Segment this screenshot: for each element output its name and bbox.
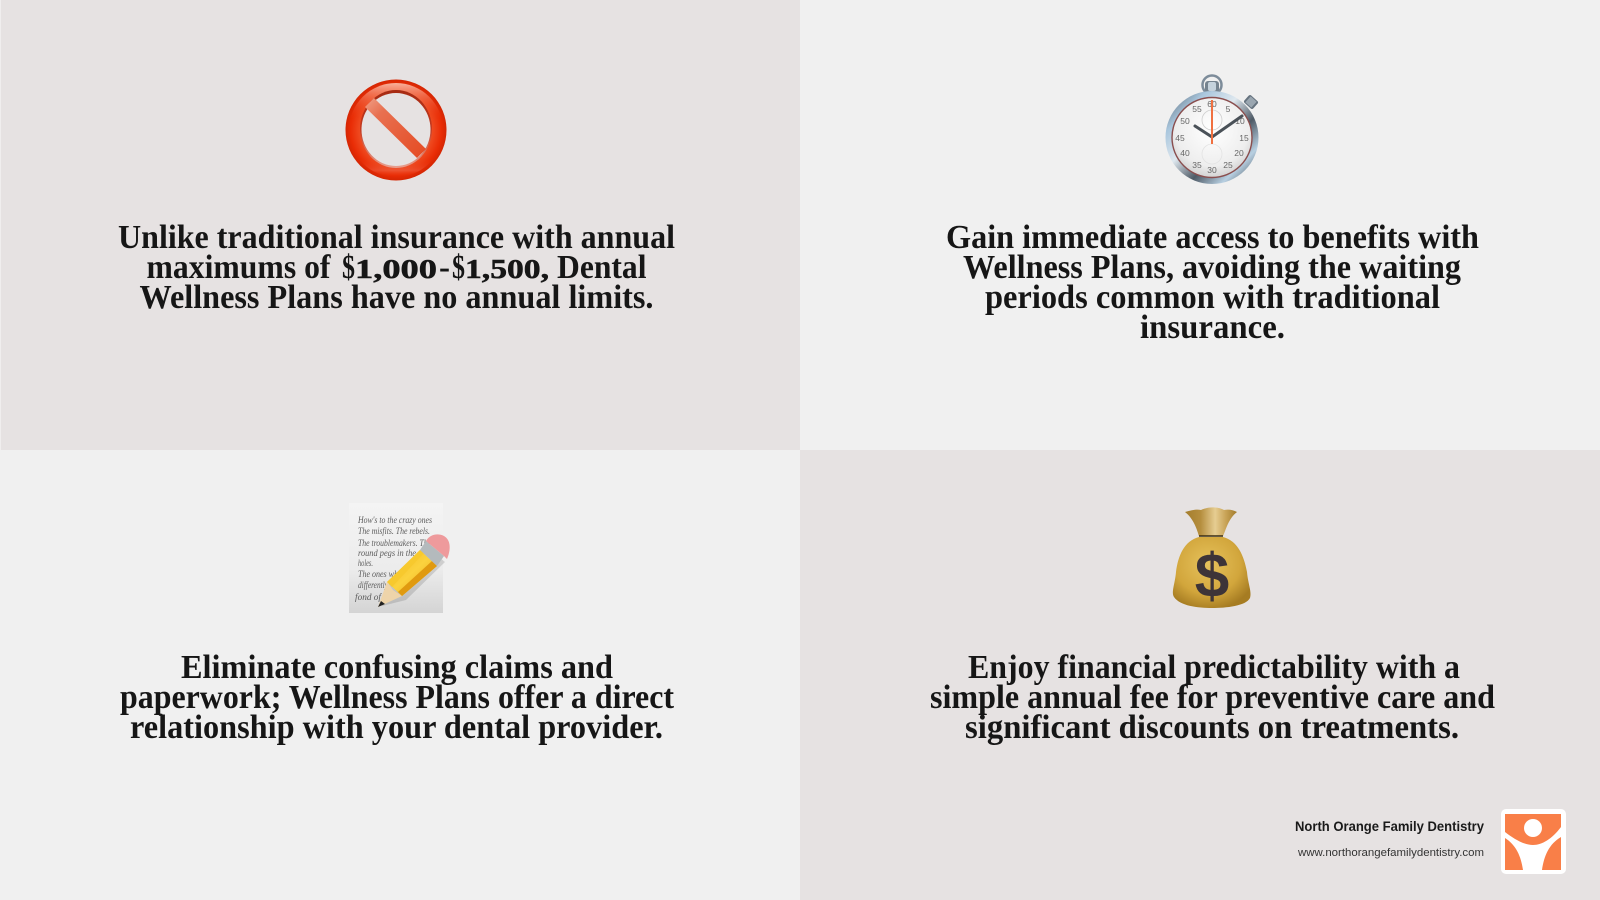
text: financial predictability: simple annual fee for preventive care and <box>930 679 1495 716</box>
text: immediate access: Gain immediate access to benefits with <box>946 219 1479 256</box>
icon: memo with pencil: The ones who <box>358 570 402 580</box>
panel: financial predictability <box>800 450 1600 900</box>
icon: stopwatch: 55 <box>1192 104 1202 114</box>
text: no annual limits: 1,000 <box>355 254 437 284</box>
text: no annual limits: Wellness Plans have no annual limits. <box>140 279 654 316</box>
icon: stopwatch: 15 <box>1239 133 1249 143</box>
icon: memo with pencil: round pegs in the <box>358 549 416 559</box>
icon: memo with pencil: holes. <box>358 559 373 569</box>
panel: immediate access <box>800 0 1600 450</box>
icon: stopwatch: 50 <box>1180 116 1190 126</box>
text: no annual limits: - <box>439 249 450 286</box>
logo <box>1501 809 1566 874</box>
panel: no paperwork <box>0 450 800 900</box>
icon: stopwatch: 45 <box>1175 133 1185 143</box>
text: no annual limits: $ <box>342 249 355 286</box>
icon: money bag <box>1173 507 1251 611</box>
icon: stopwatch: 30 <box>1207 165 1217 175</box>
text: no paperwork: paperwork; Wellness Plans offer a direct <box>120 679 675 716</box>
icon: stopwatch: 25 <box>1223 160 1233 170</box>
panel: no annual limits <box>0 0 800 450</box>
text: financial predictability: Enjoy financial predictability with a <box>968 649 1460 686</box>
text: immediate access: Wellness Plans, avoiding the waiting <box>963 249 1461 286</box>
icon: stopwatch: 40 <box>1180 148 1190 158</box>
text: no annual limits: 1,500, <box>465 254 549 284</box>
text: no annual limits: Dental <box>557 249 646 286</box>
text: no annual limits: maximums of <box>146 249 331 286</box>
text: immediate access: periods common with traditional <box>985 279 1440 316</box>
text: no annual limits: $ <box>452 249 465 286</box>
icon: stopwatch: 20 <box>1234 148 1244 158</box>
pencil <box>378 534 450 607</box>
icon: stopwatch: 5 <box>1226 104 1231 114</box>
text: immediate access: insurance. <box>1140 309 1285 346</box>
icon: memo with pencil: The misfits. The rebels. <box>358 526 430 537</box>
icon: prohibited sign <box>346 80 446 180</box>
icon: memo with pencil <box>349 503 450 613</box>
text: no paperwork: Eliminate confusing claims and <box>181 649 613 686</box>
icon: memo with pencil: How's to the crazy ones <box>357 516 432 526</box>
icon: memo with pencil: fond of <box>355 592 382 603</box>
icon: stopwatch: 10 <box>1235 116 1245 126</box>
icon: stopwatch: 60 <box>1207 99 1217 109</box>
footer: practice name: North Orange Family Dentistry <box>1295 819 1484 834</box>
text: no annual limits: Unlike traditional insurance with annual <box>118 219 675 256</box>
icon: memo with pencil: The troublemakers. The <box>358 539 431 549</box>
icon: stopwatch: 35 <box>1192 160 1202 170</box>
icon: memo with pencil: differently <box>358 580 389 591</box>
text: no paperwork: relationship with your dental provider. <box>130 709 663 746</box>
icon: stopwatch <box>1166 76 1259 184</box>
icon: money bag: $ <box>1195 542 1229 611</box>
text: financial predictability: significant discounts on treatments. <box>965 709 1459 746</box>
footer: website: www.northorangefamilydentistry.com <box>1297 847 1484 859</box>
